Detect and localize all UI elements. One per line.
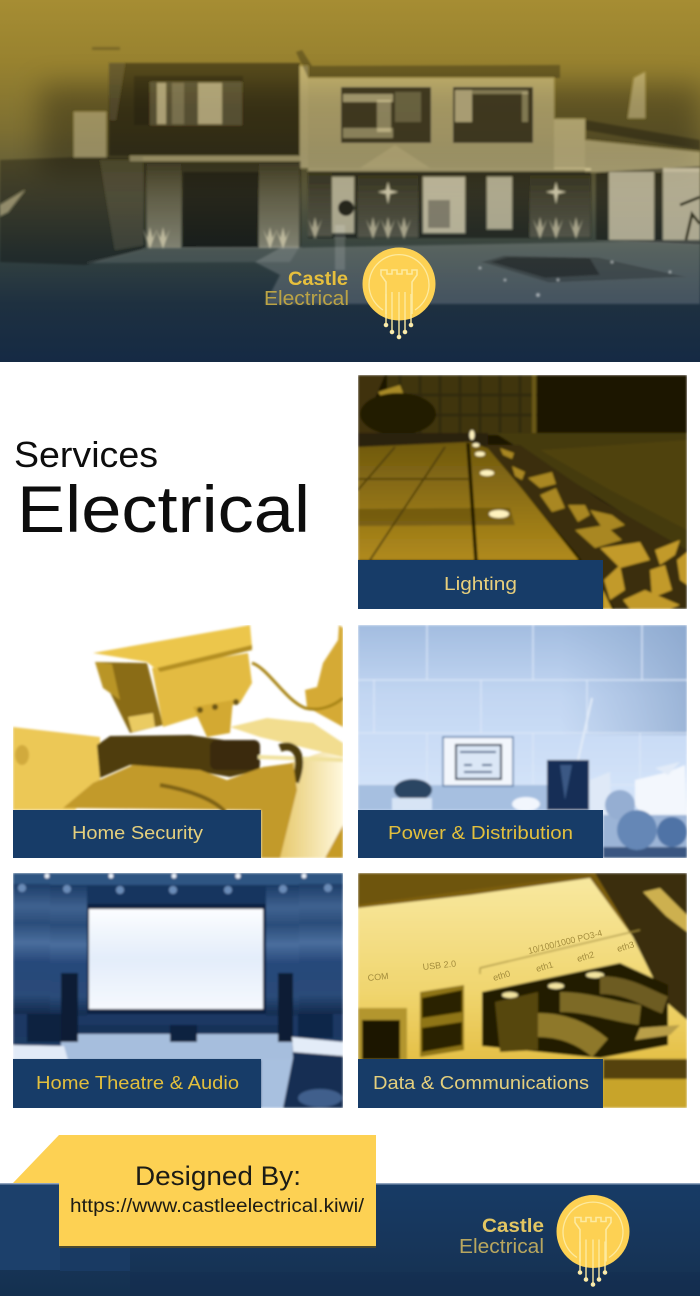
printed port labels: eth3	[616, 939, 635, 954]
callout: Designed By banner	[13, 1135, 376, 1248]
heading: Services Electrical: Electrical	[17, 472, 310, 546]
photo: network ports and cables	[358, 873, 687, 1108]
printed port labels: eth1	[535, 959, 554, 974]
label bar: Home Security: Home Security	[72, 823, 203, 843]
printed port labels	[367, 928, 635, 983]
photo: wall controller in kitchen	[358, 625, 687, 858]
logo wordmark	[264, 269, 349, 310]
logo wordmark: Electrical	[264, 288, 349, 310]
label bar: Data & Communications	[358, 1059, 603, 1108]
printed port labels: 10/100/1000 PO3-4	[527, 928, 603, 956]
photo: security camera and drill	[13, 625, 343, 858]
panel: Power & Distribution	[358, 625, 687, 858]
logo emblem	[362, 248, 436, 339]
hero photo: lit house at night	[0, 0, 700, 362]
label bar: Home Theatre & Audio: Home Theatre & Audio	[36, 1073, 239, 1093]
footer band	[0, 1183, 700, 1296]
panel: Lighting	[358, 375, 687, 609]
label bar: Power & Distribution	[358, 810, 603, 858]
label bar: Home Theatre & Audio	[13, 1059, 261, 1108]
printed port labels: COM	[367, 971, 389, 983]
photo: deck lights	[358, 375, 687, 609]
footer logo wordmark: Electrical	[459, 1236, 544, 1258]
label bar: Home Security	[13, 810, 261, 858]
label bar: Power & Distribution: Power & Distribution	[388, 823, 573, 843]
footer logo: Castle Electrical	[459, 1195, 630, 1286]
label bar: Lighting	[358, 560, 603, 609]
panel: Data & Communications	[358, 873, 687, 1108]
hero logo: Castle Electrical	[264, 248, 436, 339]
banner text: Designed By:	[135, 1161, 301, 1191]
printed port labels: USB 2.0	[422, 959, 457, 972]
banner text	[70, 1161, 365, 1217]
footer logo wordmark	[459, 1216, 544, 1258]
photo: projection screen room	[13, 873, 343, 1108]
panel: Home Theatre & Audio	[13, 873, 343, 1108]
heading: Services Electrical	[14, 434, 310, 546]
label bar: Data & Communications: Data & Communications	[373, 1073, 589, 1093]
heading: Services Electrical: Services	[14, 434, 158, 475]
logo wordmark: Castle	[288, 269, 348, 290]
footer logo emblem	[556, 1195, 630, 1286]
banner text: https://www.castleelectrical.kiwi/	[70, 1196, 365, 1217]
printed port labels: eth2	[576, 949, 595, 964]
panel: Home Security	[13, 625, 343, 858]
footer logo wordmark: Castle	[482, 1216, 544, 1237]
label bar: Lighting: Lighting	[444, 574, 517, 594]
printed port labels: eth0	[492, 968, 511, 983]
